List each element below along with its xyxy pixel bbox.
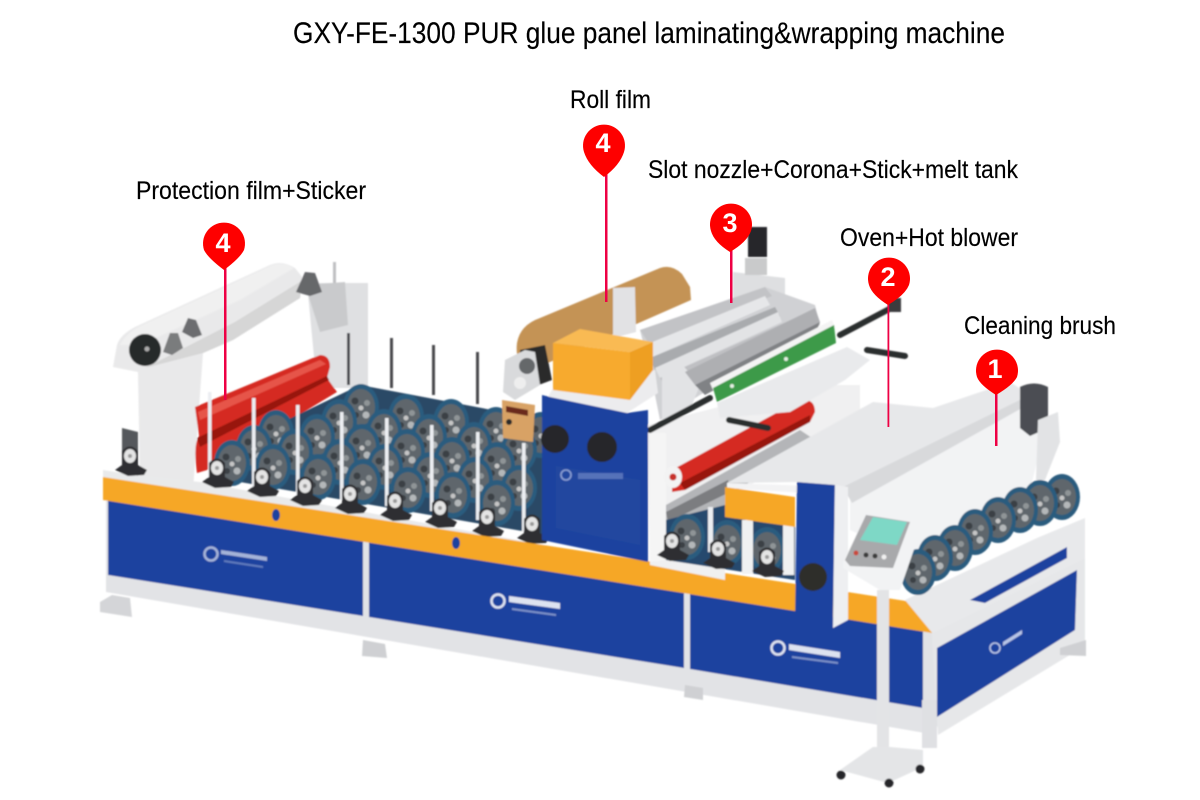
orange band xyxy=(103,477,932,633)
white ledge xyxy=(548,370,658,413)
green cutter bar xyxy=(710,320,836,402)
lower red roller xyxy=(664,400,815,492)
brush wheels xyxy=(900,474,1080,595)
oven hood xyxy=(725,382,1030,628)
callout 4: protection film xyxy=(203,223,245,400)
lower base frame xyxy=(100,500,940,733)
band fasteners xyxy=(272,509,460,549)
callout 3: slot nozzle xyxy=(710,204,752,303)
callout 2: oven xyxy=(868,258,910,427)
left film unwind frame xyxy=(113,262,368,490)
white vertical rods xyxy=(208,392,526,531)
callout 3: slot nozzle: 3 xyxy=(722,208,738,238)
oven front orange panel xyxy=(725,487,795,527)
working table xyxy=(717,347,870,418)
red pressure rollers xyxy=(195,355,337,473)
film side arm guard xyxy=(613,287,636,338)
orange drive cover xyxy=(553,329,653,400)
dark vertical rods xyxy=(347,333,479,404)
silver rollers xyxy=(640,287,820,420)
logo: left panel xyxy=(204,548,267,568)
dark backing behind roller wheels xyxy=(240,385,545,535)
side drive knob xyxy=(503,345,552,400)
blue side panels xyxy=(108,497,923,708)
brush support column xyxy=(1036,412,1060,480)
label: slot nozzle: Slot nozzle+Corona+Stick+melt tank xyxy=(648,156,1018,184)
machine illustration xyxy=(100,227,1086,788)
bearing pedestals xyxy=(115,446,549,544)
callout 1: cleaning brush: 1 xyxy=(987,354,1003,384)
label: protection film: Protection film+Sticker xyxy=(136,177,366,205)
label: cleaning brush: Cleaning brush xyxy=(964,312,1116,340)
title: GXY-FE-1300 PUR glue panel laminating&wrapping machine xyxy=(293,17,1005,50)
callout 4: roll film xyxy=(583,125,625,302)
icon: cabinet knob left xyxy=(541,425,569,453)
icon: black tension knob xyxy=(129,334,161,366)
small controller panel xyxy=(502,400,535,442)
deck surface xyxy=(103,470,545,560)
central laminating section background xyxy=(648,385,860,580)
logo marks on blue panels xyxy=(204,548,840,664)
guide bar end clamp xyxy=(888,298,901,312)
control stand pole and wheels xyxy=(836,590,937,788)
brush motor xyxy=(1020,384,1048,436)
brush section body xyxy=(850,395,1043,560)
oven blue control column xyxy=(795,482,835,628)
callout 4: protection film: 4 xyxy=(215,228,231,258)
label: oven: Oven+Hot blower xyxy=(840,224,1018,252)
logo: right panel xyxy=(772,642,840,664)
roll film spool xyxy=(517,267,691,372)
callout 4: roll film: 4 xyxy=(595,128,611,158)
blue centre cabinet xyxy=(541,395,648,562)
label: roll film: Roll film xyxy=(570,86,651,114)
logo: centre panel xyxy=(492,594,560,616)
callout 2: oven: 2 xyxy=(880,262,896,292)
icon: cabinet knob right xyxy=(587,432,617,462)
roller wheel rows xyxy=(214,384,559,526)
touch screen control box xyxy=(843,513,920,590)
back plate with sensor xyxy=(733,227,785,312)
small roller wheels xyxy=(657,507,794,577)
right base module frame xyxy=(905,518,1086,735)
callout 1: cleaning brush xyxy=(976,350,1018,446)
dark guide bars and handles xyxy=(650,306,905,430)
